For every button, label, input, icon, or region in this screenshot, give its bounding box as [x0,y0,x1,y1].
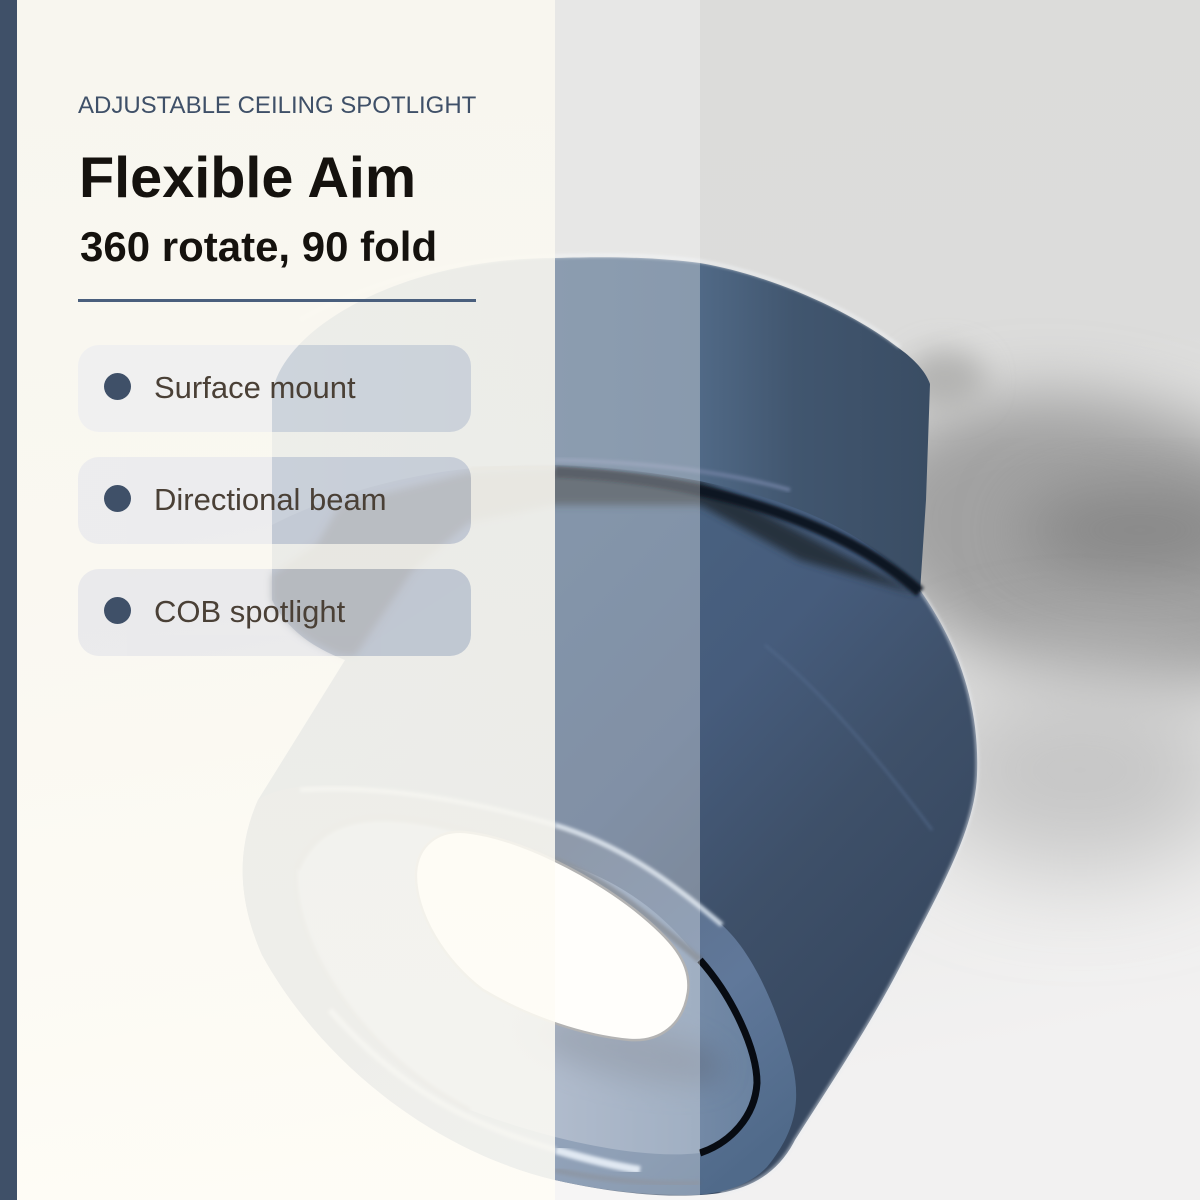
eyebrow label: ADJUSTABLE CEILING SPOTLIGHT [78,92,476,119]
centre translucent strip [555,0,700,1200]
feature pill backgrounds [78,345,471,656]
bullet: Surface mount [104,373,131,400]
bullet: COB spotlight [104,597,131,624]
title: Flexible Aim [79,146,416,210]
left text panel overlay [17,0,555,1200]
label: Surface mount: Surface mount [154,370,356,405]
bullet: Directional beam [104,485,131,512]
divider rule [78,299,476,302]
subtitle: 360 rotate, 90 fold [80,223,437,270]
left accent bar [0,0,17,1200]
label: Directional beam: Directional beam [154,482,387,517]
label: COB spotlight: COB spotlight [154,594,345,629]
